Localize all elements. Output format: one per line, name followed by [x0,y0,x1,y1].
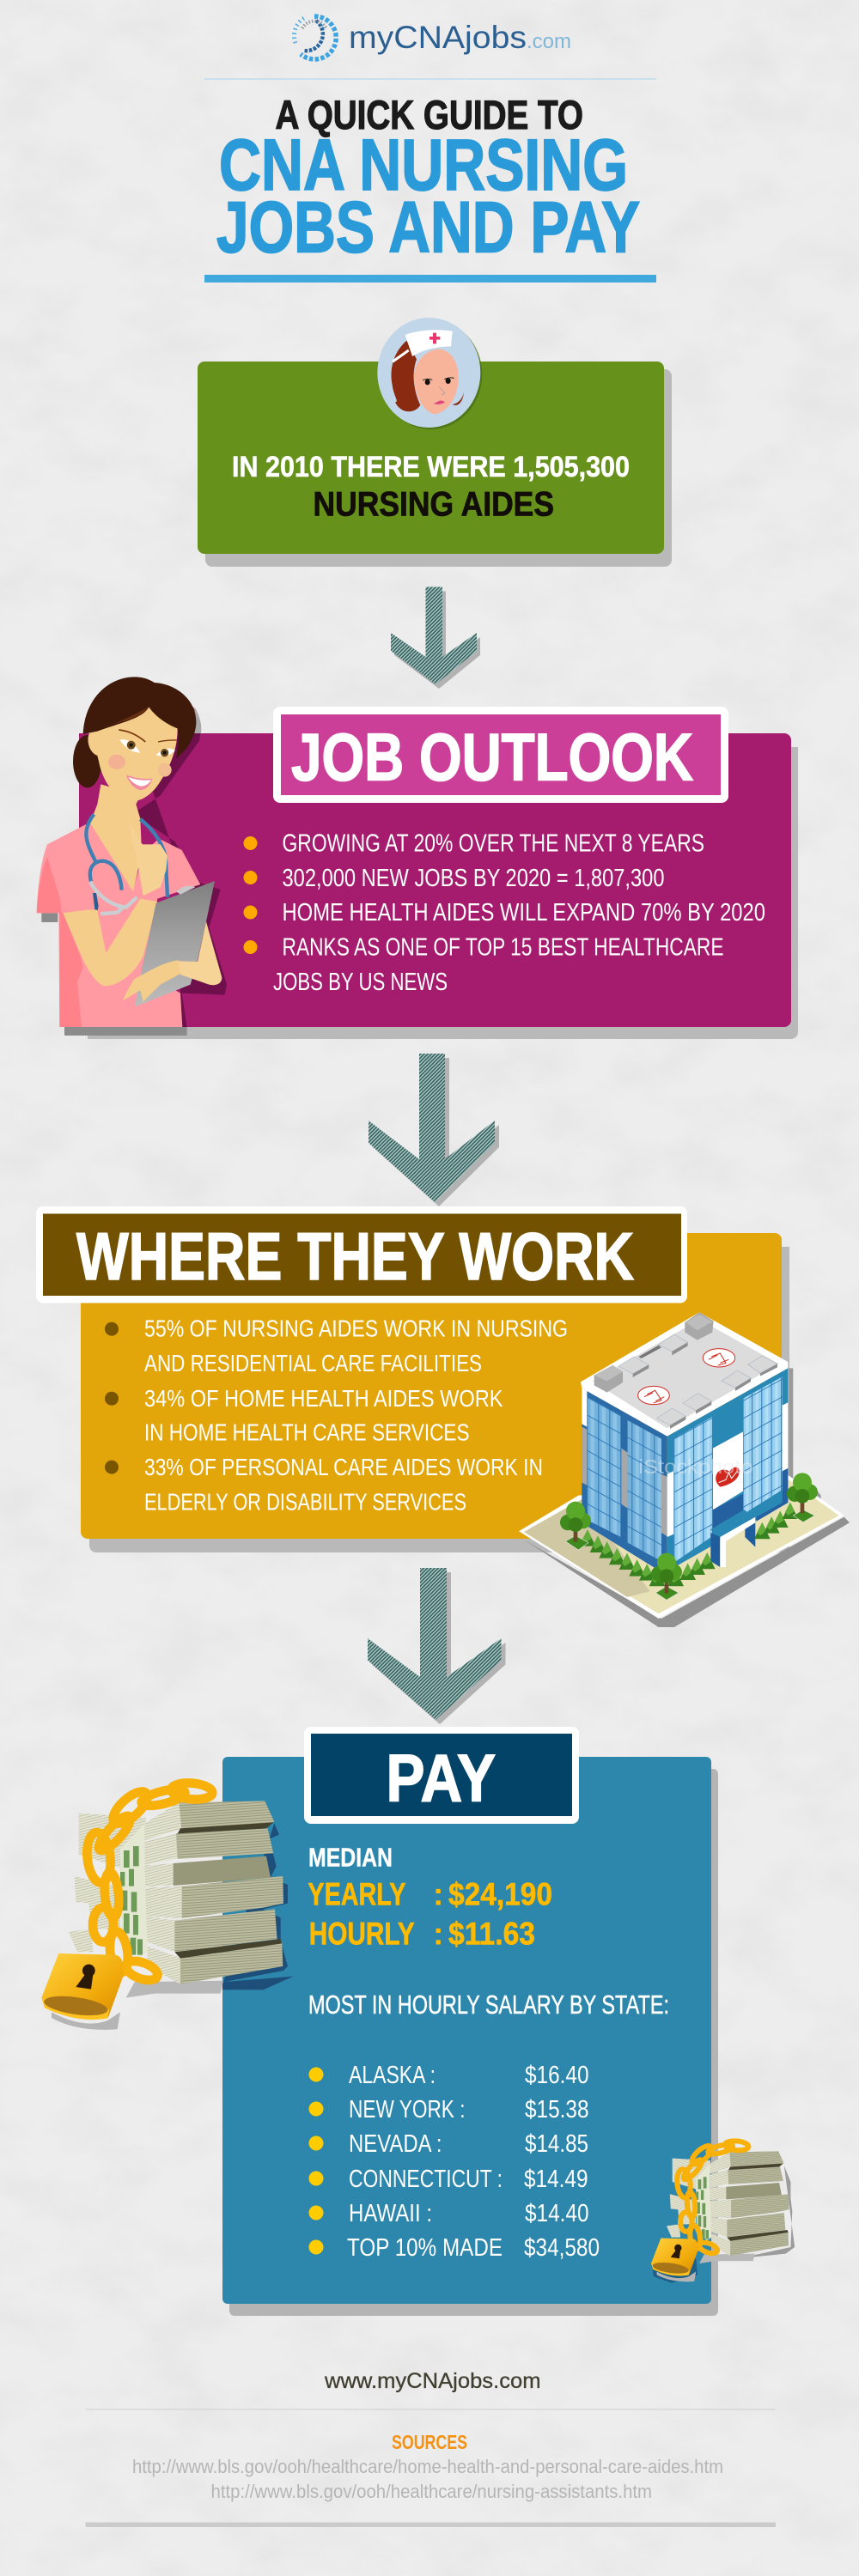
heading: job outlook [273,707,728,803]
bullet list: workplaces: IN HOME HEALTH CARE SERVICES [144,1419,469,1446]
state salary list: $14.40 [525,2200,589,2227]
bullet list: workplaces: ELDERLY OR DISABILITY SERVICES [144,1488,466,1515]
arrow 2 [369,1054,499,1206]
state salary list: $34,580 [524,2234,600,2262]
median pay: $24,190 [448,1877,552,1912]
panel: nursing aides count [198,318,672,567]
panel: pay [41,1727,795,2316]
stat line emphasis: NURSING AIDES [313,486,554,524]
footer: website: www.myCNAjobs.com [324,2369,541,2393]
title [216,92,640,268]
title line 3: JOBS AND PAY [216,187,640,268]
median pay: YEARLY [308,1877,406,1912]
sources [132,2431,723,2502]
panel: job outlook [37,677,798,1039]
state salary list: TOP 10% MADE [347,2234,503,2262]
source url 2: http://www.bls.gov/ooh/healthcare/nursing-assistants.htm [211,2481,652,2502]
illustration: chained money small [651,2140,795,2283]
sources heading: SOURCES [392,2431,467,2453]
watermark text: iStockphoto [638,1455,753,1478]
median pay: $11.63 [448,1917,535,1952]
median pay [308,1843,552,1952]
bullet list: outlook: 302,000 NEW JOBS BY 2020 = 1,807,300 [282,865,665,892]
state salary list: $16.40 [525,2062,589,2089]
heading: pay: PAY [387,1740,496,1815]
bullet list: outlook: RANKS AS ONE OF TOP 15 BEST HEALTHCARE [282,934,723,962]
state salary list [309,2062,600,2262]
illustration: nurse with clipboard [37,677,227,1036]
heading: pay [304,1727,579,1824]
bullet list: workplaces: 33% OF PERSONAL CARE AIDES WORK IN [144,1454,543,1480]
state salary list: HAWAII : [349,2200,432,2227]
state salary list: NEVADA : [349,2130,442,2158]
title line 2: CNA NURSING [219,125,628,205]
heading: job outlook: JOB OUTLOOK [291,720,693,795]
bullet list: workplaces: 55% OF NURSING AIDES WORK IN NURSING [144,1315,568,1342]
illustration: chained money large [41,1782,294,2030]
heading: where they work: WHERE THEY WORK [76,1218,634,1294]
source url 1: http://www.bls.gov/ooh/healthcare/home-health-and-personal-care-aides.htm [132,2456,723,2477]
bullet list: workplaces: AND RESIDENTIAL CARE FACILITIES [144,1350,482,1376]
bullet list: outlook: GROWING AT 20% OVER THE NEXT 8 YEARS [282,829,704,857]
median pay: : [433,1877,443,1912]
median pay: HOURLY [309,1917,415,1952]
title line 1: A QUICK GUIDE TO [275,92,583,137]
state salary list: NEW YORK : [349,2096,466,2123]
bullet list: outlook [244,829,765,996]
icon: radial logo mark [294,16,336,59]
median pay: MEDIAN [308,1843,393,1872]
logo suffix: .com [527,30,571,53]
bullet list: outlook: HOME HEALTH AIDES WILL EXPAND 70% BY 2020 [282,899,765,927]
icon: nurse avatar [377,318,482,429]
state list heading: MOST IN HOURLY SALARY BY STATE: [308,1990,669,2020]
bullet list: workplaces [105,1315,568,1515]
stat line: IN 2010 THERE WERE 1,505,300 [232,451,630,483]
arrow 1 [391,587,480,689]
bullet list: workplaces: 34% OF HOME HEALTH AIDES WORK [144,1385,503,1412]
state salary list: $14.85 [525,2130,588,2158]
arrow 3 [368,1568,505,1724]
state salary list: ALASKA : [349,2062,436,2089]
heading: where they work [36,1206,687,1303]
logo: myCNAjobs.com [294,16,571,59]
state salary list: $14.49 [524,2166,588,2193]
logo wordmark: myCNAjobs [349,20,527,55]
panel: where they work [36,1206,850,1627]
state salary list: $15.38 [525,2096,589,2123]
illustration: hospital building [519,1312,850,1627]
state salary list: CONNECTICUT : [349,2166,503,2193]
median pay: : [433,1917,443,1952]
bullet list: outlook: JOBS BY US NEWS [273,969,448,996]
